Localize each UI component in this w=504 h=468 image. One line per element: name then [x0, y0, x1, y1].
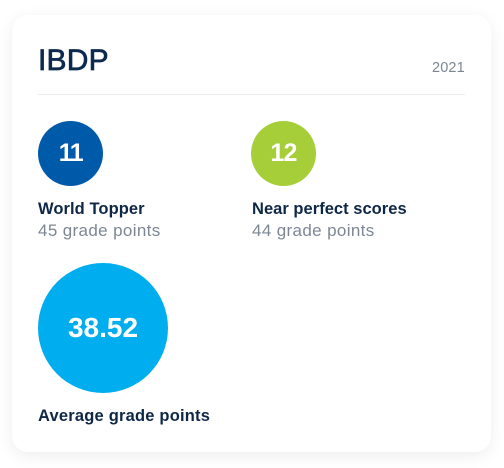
icon: world topper count circle	[38, 121, 103, 186]
text: 44 grade points: 44 grade points	[252, 221, 375, 240]
icon: near perfect count circle: 12	[270, 139, 297, 167]
heading: average grade points: Average grade points	[38, 407, 210, 425]
title: IBDP	[38, 44, 109, 77]
icon: average grade circle	[38, 263, 168, 393]
icon: near perfect count circle	[251, 121, 316, 186]
icon: average grade circle: 38.52	[68, 312, 138, 343]
year label: 2021	[432, 60, 465, 76]
text: 45 grade points: 45 grade points	[38, 221, 161, 240]
heading: world topper: World Topper	[38, 200, 145, 218]
icon: world topper count circle: 11	[59, 139, 82, 167]
heading: near perfect scores: Near perfect scores	[252, 200, 407, 218]
